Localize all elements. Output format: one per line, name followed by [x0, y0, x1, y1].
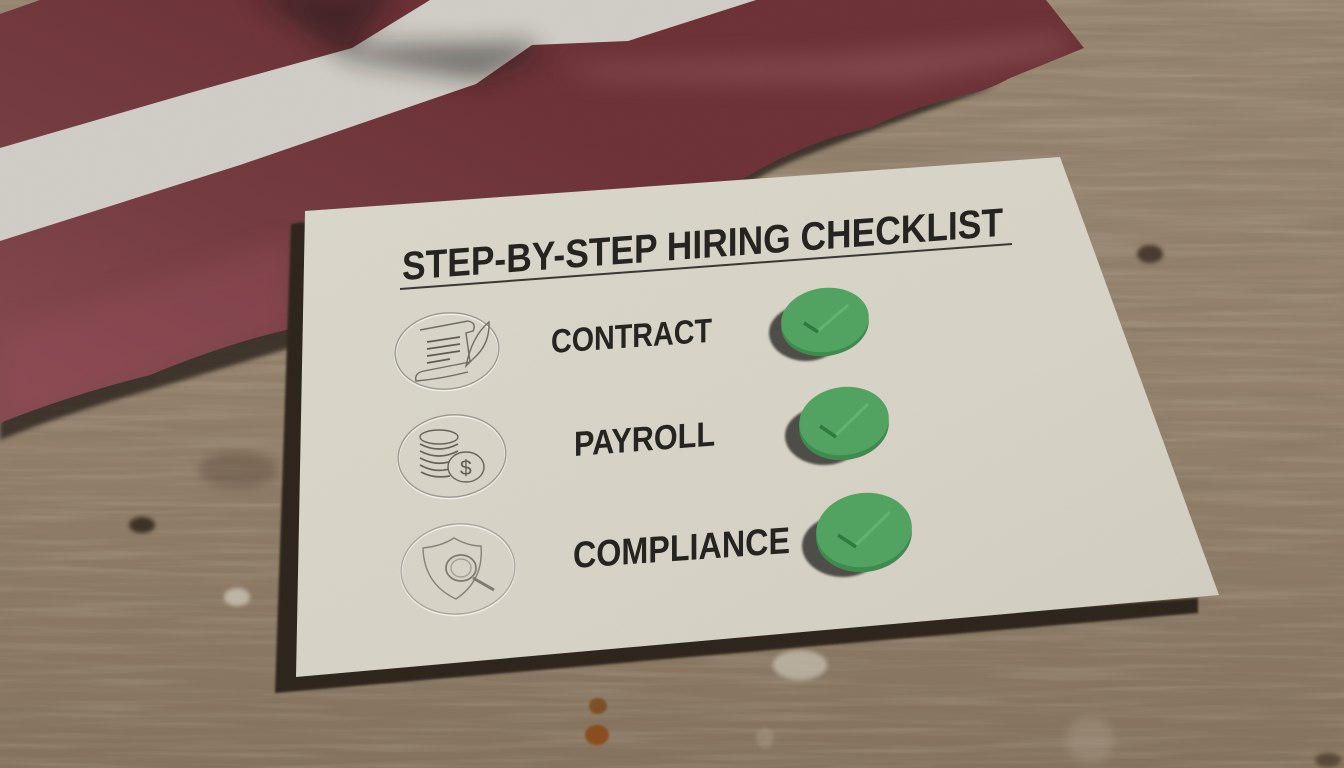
flag fold shadow: [250, 0, 540, 80]
card shadow: [275, 222, 1198, 693]
icon: coin stack and dollar: [394, 410, 510, 503]
label: payroll: PAYROLL: [574, 414, 715, 464]
check button: contract: [769, 282, 873, 362]
checklist card: [296, 157, 1219, 677]
icon: dollar sign: $: [460, 457, 472, 480]
Latvian flag: [0, 0, 1100, 430]
row: payroll: [394, 381, 893, 503]
check button: compliance: [802, 487, 917, 578]
icon: shield and magnifier: [397, 518, 519, 621]
label: contract: CONTRACT: [551, 311, 712, 361]
flag fold highlight: [560, 34, 1070, 85]
row: compliance: [397, 487, 917, 621]
flag shadow on table: [0, 85, 1000, 440]
flag white stripe: [0, 0, 756, 241]
flag lower glow: [86, 253, 283, 353]
icon: contract scroll and quill: [391, 308, 503, 395]
row: contract: [391, 282, 873, 395]
label: compliance: COMPLIANCE: [573, 520, 790, 577]
check button: payroll: [785, 381, 893, 466]
title: STEP-BY-STEP HIRING CHECKLIST: [402, 200, 1003, 288]
title underline: [400, 244, 1012, 289]
